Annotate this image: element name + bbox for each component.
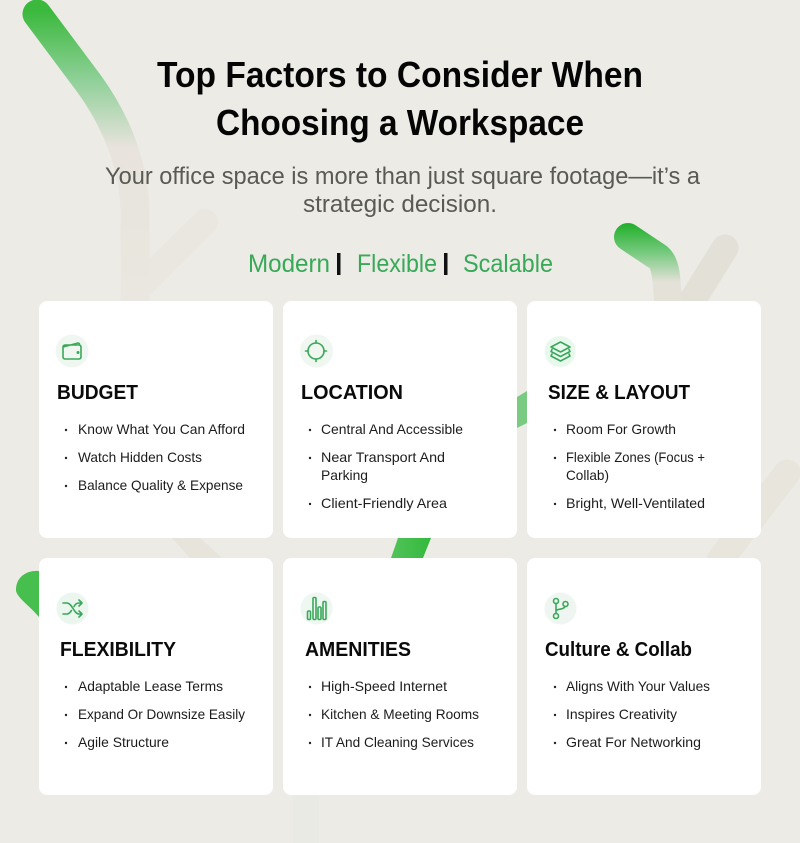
list: culture and collab: Inspires Creativity [566, 706, 677, 722]
title: Choosing a Workspace [216, 102, 584, 143]
list: budget [65, 421, 245, 493]
icon: layers [544, 336, 576, 367]
list: location: Parking [321, 467, 368, 483]
list: flexibility: Agile Structure [78, 734, 169, 750]
decorative branch: bottom faint stem [293, 795, 319, 843]
list: amenities: High-Speed Internet [321, 678, 447, 694]
list: size and layout: Flexible Zones (Focus + [566, 449, 705, 465]
decorative branch: right green stem [628, 237, 669, 310]
decorative branch: right side branch [685, 248, 725, 312]
decorative branch: left side branch [134, 222, 205, 292]
heading: culture and collab: Culture & Collab [545, 639, 692, 661]
list: flexibility [65, 678, 245, 750]
subtitle: Your office space is more than just square footage—it’s a [105, 163, 701, 190]
decorative branch: left green stem [37, 14, 135, 305]
heading: size and layout: SIZE & LAYOUT [548, 382, 690, 404]
decorative branch: center lower green [391, 538, 431, 558]
heading: budget: BUDGET [57, 382, 138, 404]
title: Top Factors to Consider When [157, 54, 643, 95]
list: size and layout [554, 421, 705, 511]
panel: location [283, 301, 517, 538]
decorative branch: far right [720, 473, 787, 560]
list: size and layout: Room For Growth [566, 421, 676, 437]
panel: culture and collab [527, 558, 761, 795]
list: culture and collab: Great For Networking [566, 734, 701, 750]
list: size and layout: Bright, Well-Ventilated [566, 495, 705, 511]
list: culture and collab [554, 678, 710, 750]
list: location: Central And Accessible [321, 421, 463, 437]
list: location: Near Transport And [321, 449, 445, 465]
decorative branch: left lower beige [172, 538, 222, 558]
list: amenities [309, 678, 479, 750]
icon: git branch [544, 592, 576, 624]
title [157, 54, 643, 143]
heading: location: LOCATION [301, 382, 403, 404]
panel: budget [39, 301, 273, 538]
list: flexibility: Adaptable Lease Terms [78, 678, 223, 694]
heading: flexibility: FLEXIBILITY [60, 639, 177, 661]
list: flexibility: Expand Or Downsize Easily [78, 706, 245, 722]
icon: wallet [56, 334, 88, 368]
decorative branch: left green leaf [16, 571, 39, 617]
icon: shuffle [56, 592, 88, 624]
list: size and layout: Collab) [566, 467, 609, 483]
icon: bar chart [300, 592, 332, 624]
tagline: Flexible [357, 250, 437, 278]
tagline [248, 250, 553, 278]
list: budget: Know What You Can Afford [78, 421, 245, 437]
icon: target [300, 334, 333, 368]
heading: amenities: AMENITIES [305, 639, 411, 661]
list: budget: Watch Hidden Costs [78, 449, 202, 465]
list: culture and collab: Aligns With Your Values [566, 678, 710, 694]
tagline: Scalable [463, 250, 553, 278]
list: budget: Balance Quality & Expense [78, 477, 243, 493]
list: amenities: IT And Cleaning Services [321, 734, 474, 750]
list: location: Client-Friendly Area [321, 495, 447, 511]
list: location [309, 421, 463, 511]
panel: flexibility [39, 558, 273, 795]
list: amenities: Kitchen & Meeting Rooms [321, 706, 479, 722]
subtitle [105, 163, 701, 218]
decorative branch: center green sliver [517, 391, 527, 428]
panel: size and layout [527, 301, 761, 538]
subtitle: strategic decision. [303, 191, 497, 218]
tagline: Modern [248, 250, 330, 278]
panel: amenities [283, 558, 517, 795]
